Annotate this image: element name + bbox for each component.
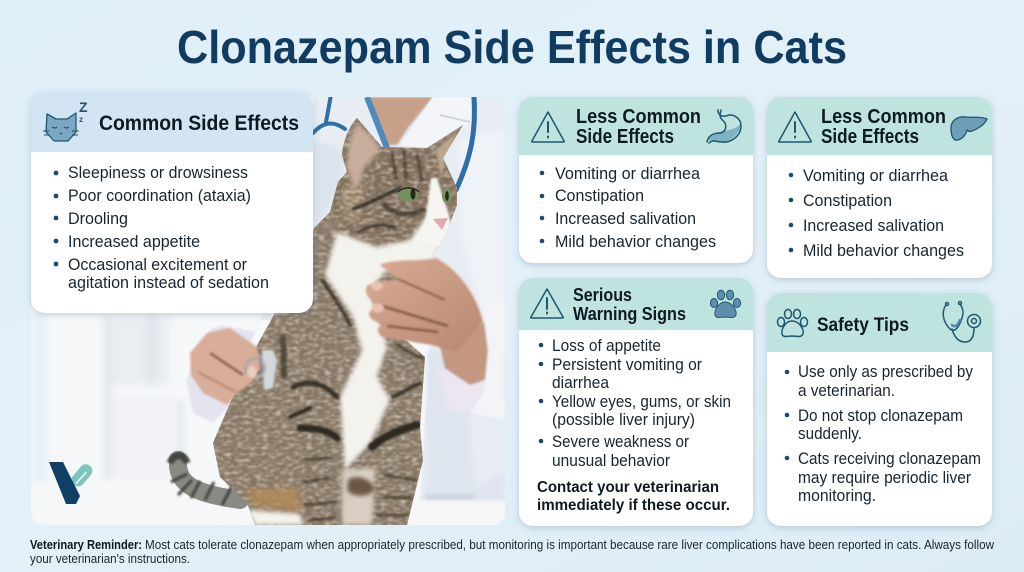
icon: stethoscope [943, 302, 980, 342]
heading [576, 106, 701, 148]
list: Increased appetite [68, 232, 200, 251]
list: Cats receiving clonazepam [798, 450, 981, 468]
heading: Safety Tips [817, 315, 909, 336]
list: Persistent vomiting or [552, 356, 702, 374]
list: Use only as prescribed by [798, 363, 974, 381]
list [789, 167, 964, 260]
list: diarrhea [552, 374, 610, 392]
panel: less common side effects (liver) [767, 97, 992, 278]
icon: sleeping cat [43, 99, 88, 141]
heading: Common Side Effects [99, 112, 299, 135]
skin at collar [368, 97, 433, 145]
list: Poor coordination (ataxia) [68, 186, 251, 205]
panel: serious warning signs [519, 278, 753, 526]
list: Drooling [68, 209, 128, 228]
list: Severe weakness or [552, 433, 689, 451]
logo: V with teal capsule [49, 462, 95, 504]
icon: paw outline [778, 310, 808, 336]
heading: Side Effects [576, 126, 674, 148]
list: Increased salivation [803, 217, 944, 235]
list: Mild behavior changes [803, 242, 964, 260]
vet hand on the neck [366, 258, 483, 352]
lab coat [262, 97, 505, 500]
list: Loss of appetite [552, 337, 661, 355]
list [785, 363, 981, 505]
list [539, 337, 731, 470]
list: Constipation [555, 187, 644, 205]
right sleeve and forearm [438, 312, 505, 418]
list: Sleepiness or drowsiness [68, 163, 248, 182]
stethoscope tubing [313, 95, 474, 190]
icon: sleeping cat: z [79, 115, 83, 124]
list: Occasional excitement or [68, 255, 247, 274]
icon: liver [951, 117, 987, 140]
footer: veterinary reminder [30, 537, 995, 566]
callout [537, 479, 730, 514]
heading [821, 106, 946, 148]
list: may require periodic liver [798, 469, 971, 487]
list: Mild behavior changes [555, 233, 716, 251]
list: Constipation [803, 192, 892, 210]
icon: sleeping cat: Z [79, 99, 88, 115]
icon: warning triangle [532, 112, 564, 142]
list: suddenly. [798, 425, 862, 443]
heading: Serious [573, 285, 632, 305]
panel: less common side effects (stomach) [519, 97, 753, 263]
callout: immediately if these occur. [537, 497, 730, 514]
list: a veterinarian. [798, 382, 895, 400]
tabby cat [213, 118, 463, 525]
panel: common side effects [31, 92, 313, 313]
callout: Contact your veterinarian [537, 479, 719, 496]
tabby tail [178, 460, 240, 500]
photo: veterinarian examining a tabby cat [31, 95, 505, 530]
vet hand holding the stethoscope chest piece [190, 328, 277, 405]
heading: Side Effects [821, 126, 919, 148]
left ear inner [347, 125, 380, 190]
panel: safety tips [767, 293, 992, 526]
heading: Less Common [576, 106, 701, 128]
list: Vomiting or diarrhea [803, 167, 949, 185]
icon: paw [710, 290, 741, 318]
list: (possible liver injury) [552, 411, 695, 429]
icon: warning triangle [779, 112, 811, 142]
footer: veterinary reminder: your veterinarian's instructions. [30, 551, 190, 566]
list: Yellow eyes, gums, or skin [552, 393, 731, 411]
cat eyes and nose [398, 186, 452, 230]
tabby stripes [283, 152, 423, 520]
list [54, 163, 269, 292]
list: Vomiting or diarrhea [555, 165, 701, 183]
icon: stomach [707, 110, 741, 143]
heading: Less Common [821, 106, 946, 128]
heading [573, 285, 686, 324]
title: Clonazepam Side Effects in Cats [177, 21, 847, 73]
list: Do not stop clonazepam [798, 407, 963, 425]
sleeve of the left arm [186, 325, 255, 422]
white chest and belly [247, 215, 452, 525]
heading: Warning Signs [573, 304, 686, 324]
list [540, 165, 716, 251]
icon: warning triangle [531, 289, 563, 318]
list: unusual behavior [552, 452, 670, 470]
list: agitation instead of sedation [68, 273, 269, 292]
face blaze [422, 176, 452, 247]
list: Increased salivation [555, 210, 696, 228]
footer: veterinary reminder: Veterinary Reminder: [30, 537, 142, 552]
list: monitoring. [798, 487, 876, 505]
